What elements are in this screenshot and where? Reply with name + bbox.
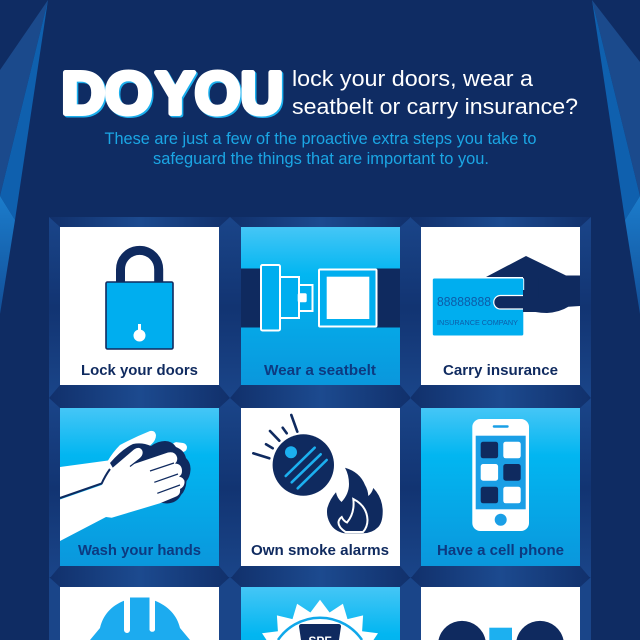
intro text: These are just a few of the proactive extra steps you take to [104,129,536,148]
label: wash your hands: Wash your hands [78,543,201,559]
panel: sunscreen [241,587,400,640]
icon: hand holding card: 88888888 [437,295,491,309]
panel: own smoke alarms [241,408,400,566]
panel: people [421,587,580,640]
intro text [104,129,536,168]
heading text: lock your doors, wear a [292,66,533,91]
bevelled grid frame [49,217,591,640]
panel: wash your hands [60,408,219,566]
icon: smartphone [472,419,529,531]
panel: hard hat [60,587,219,640]
icon: hand holding card [432,256,580,336]
label: have a cell phone: Have a cell phone [437,543,564,559]
label: own smoke alarms: Own smoke alarms [251,543,389,559]
panel: carry insurance [421,227,580,385]
icon: smoke alarm [253,415,334,496]
icon: seatbelt buckle [241,265,400,330]
icon: hand holding card: INSURANCE COMPANY [437,318,518,327]
label: wear a seatbelt: Wear a seatbelt [264,363,376,379]
heading text: seatbelt or carry insurance? [292,94,578,119]
icon: hard hat [90,598,190,640]
heading text [292,66,578,119]
label: lock your doors: Lock your doors [81,363,198,379]
title: DO YOU: YOU [157,62,284,128]
icon: washing hands [60,431,191,541]
intro text: safeguard the things that are important to you. [153,149,489,168]
title: DO YOU [62,60,284,128]
icon: flame [327,468,383,533]
panel: lock your doors [60,227,219,385]
title: DO YOU: DO [62,60,152,126]
icon: sun and SPF bottle [262,600,378,640]
label: carry insurance: Carry insurance [443,363,558,379]
title: DO YOU: DO [63,62,154,128]
left side facets [0,0,48,314]
icon: padlock [106,250,173,349]
icon: people [438,621,564,640]
panel: wear a seatbelt [241,227,400,385]
title: DO YOU: YOU [156,60,283,126]
right side facets [592,0,640,314]
panel: have a cell phone [421,408,580,566]
